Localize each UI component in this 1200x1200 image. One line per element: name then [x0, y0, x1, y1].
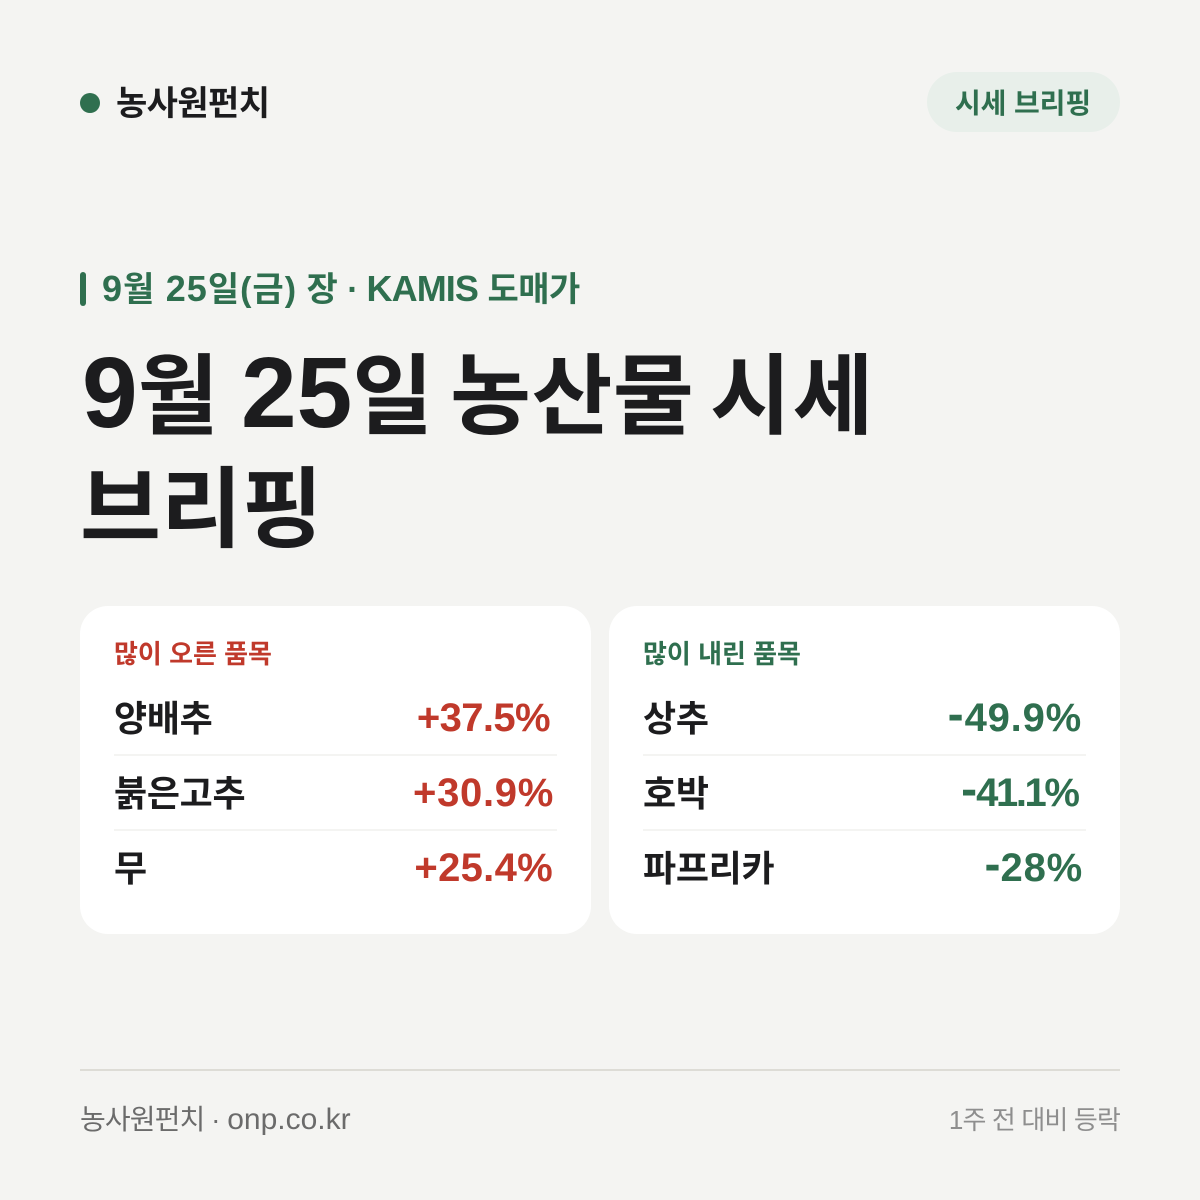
- row: 양배추: 양배추: [114, 698, 212, 739]
- title: 9월: [82, 337, 219, 449]
- row: 호박: -41.1%: [961, 763, 1080, 816]
- title: 브리핑: [80, 460, 323, 559]
- row: 파프리카: [643, 838, 1083, 891]
- accent bar: [80, 272, 86, 306]
- title: 농산물: [450, 347, 694, 446]
- row: 상추: [643, 688, 1082, 741]
- row: 파프리카: 파프리카: [643, 848, 774, 889]
- brand name: 농사원펀치: [116, 85, 269, 123]
- row: 양배추: +37.5%: [417, 696, 550, 740]
- row: 양배추: [114, 696, 550, 740]
- row: 무: +25.4%: [414, 846, 553, 890]
- row: 상추: 상추: [643, 698, 709, 739]
- row: 붉은고추: +30.9%: [413, 771, 554, 815]
- footer source: 농사원펀치 · onp.co.kr: [80, 1103, 351, 1136]
- date text: 9월 25일(금) 장 · KAMIS 도매가: [102, 268, 580, 309]
- panel: falling items: [609, 606, 1120, 934]
- badge: 시세 브리핑: 시세 브리핑: [955, 88, 1091, 119]
- title: 25일: [241, 337, 433, 449]
- panel heading: 많이 내린 품목: [643, 639, 801, 669]
- badge: 시세 브리핑: [927, 72, 1120, 132]
- row: 붉은고추: 붉은고추: [114, 773, 245, 814]
- date label: [80, 268, 580, 309]
- title: [80, 337, 875, 559]
- panel: rising items: [80, 606, 591, 934]
- title: 시세: [710, 347, 875, 446]
- panel heading: 많이 오른 품목: [114, 639, 272, 669]
- row: 파프리카: -28%: [985, 838, 1083, 891]
- row: 상추: -49.9%: [948, 688, 1082, 741]
- row: 붉은고추: [114, 771, 554, 815]
- row: 무: [114, 846, 553, 890]
- row: 호박: [643, 763, 1080, 816]
- header brand: [80, 85, 269, 123]
- footer note: 1주 전 대비 등락: [949, 1105, 1120, 1135]
- icon: green dot: [80, 93, 100, 113]
- row: 무: 무: [114, 848, 147, 889]
- row: 호박: 호박: [643, 773, 709, 814]
